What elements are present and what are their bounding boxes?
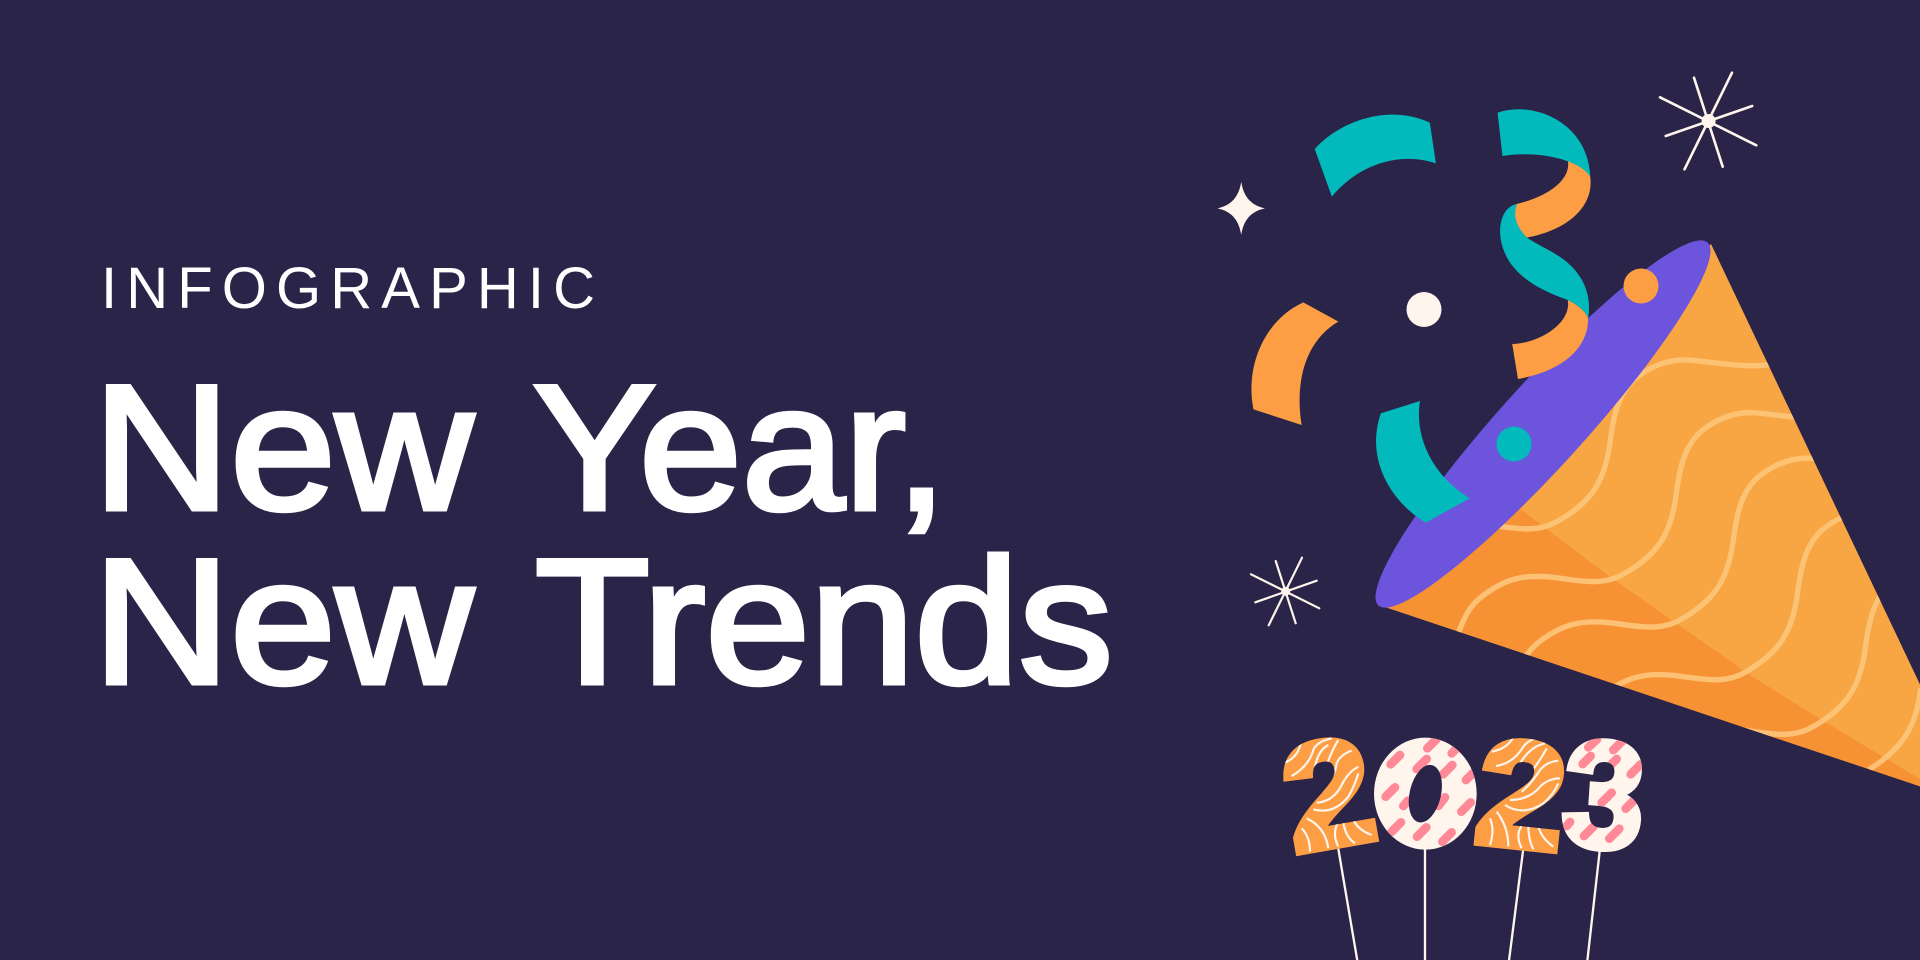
- 2023 number signs: [1283, 737, 1642, 960]
- cone wavy lines: [1456, 357, 1920, 770]
- title: New Year, New Trends: New: [93, 522, 473, 721]
- teal confetti top: [1315, 115, 1436, 197]
- digit 2 second: 2: [1469, 707, 1574, 883]
- title: New Year, New Trends: Year,: [533, 348, 947, 547]
- cone opening: [1347, 214, 1739, 634]
- curled ribbon: [1498, 109, 1591, 379]
- orange confetti left: [1251, 302, 1338, 425]
- title: New Year, New Trends: Trends: [535, 522, 1113, 721]
- digit 2: [1283, 737, 1380, 856]
- sticks: [1338, 845, 1600, 960]
- title: New Year, New Trends: [93, 348, 1113, 721]
- digit 0 counter: [1403, 762, 1447, 826]
- digit 0: 0: [1378, 717, 1473, 877]
- confetti dots: [1406, 268, 1658, 462]
- digit 3: [1562, 738, 1642, 852]
- teal confetti bottom: [1376, 401, 1470, 523]
- digit 2: 2: [1270, 704, 1387, 884]
- confetti and ribbon: [1218, 109, 1591, 523]
- eyebrow: INFOGRAPHIC: INFOGRAPHIC: [101, 256, 595, 321]
- sparkle star: [1218, 182, 1265, 235]
- digit 0: [1374, 738, 1477, 850]
- burst top right: [1660, 73, 1756, 169]
- title: New Year, New Trends: New: [93, 348, 473, 547]
- cone shadow: [1385, 508, 1920, 788]
- party popper cone: [1376, 240, 1920, 786]
- digit 2 second: [1473, 738, 1564, 854]
- cone body: [1385, 244, 1920, 788]
- burst lower left: [1251, 558, 1319, 625]
- digit 3: 3: [1558, 709, 1650, 882]
